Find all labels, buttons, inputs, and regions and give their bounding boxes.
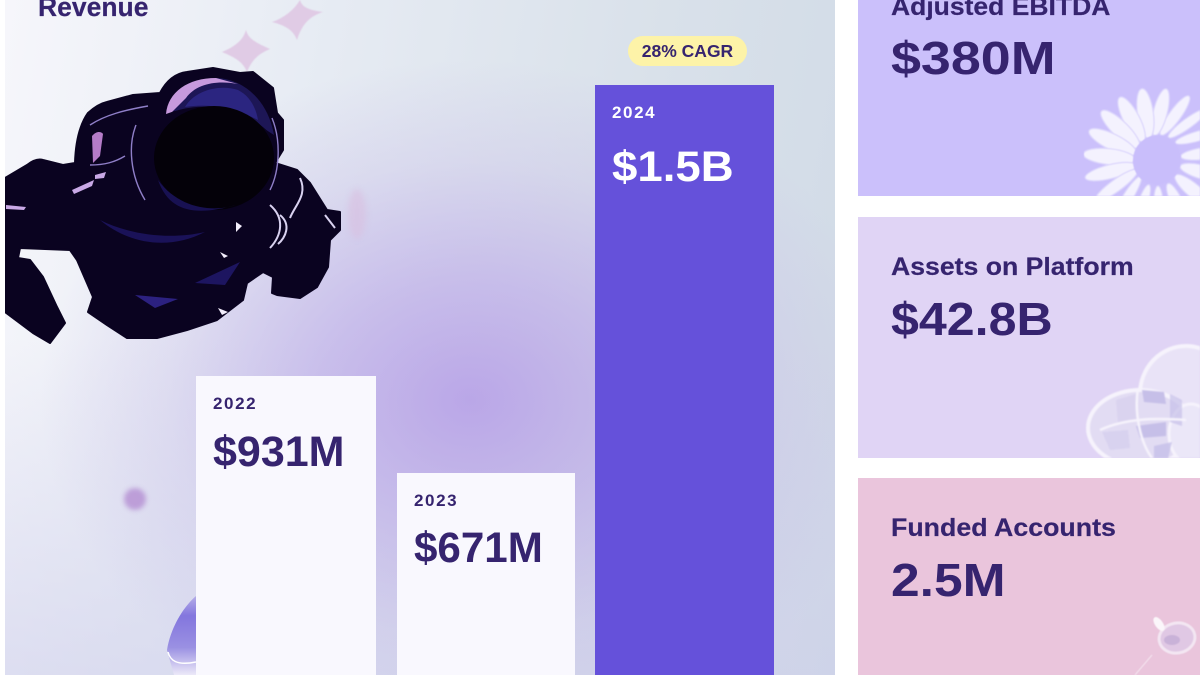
panel: revenue: [5, 0, 835, 675]
value: $931M: $931M: [213, 428, 344, 476]
label: 2023: 2023: [414, 491, 458, 510]
icon: glass sphere: [167, 596, 196, 675]
icon: small satellite: [1134, 616, 1197, 675]
card: Adjusted EBITDA: [858, 0, 1200, 196]
icon: astronaut: [5, 67, 341, 344]
label: 2022: 2022: [213, 394, 257, 413]
value: 2.5M: 2.5M: [891, 554, 1006, 606]
bar: 2024: [595, 85, 774, 675]
bar: 2023: [397, 473, 575, 675]
card: Assets on Platform: [858, 217, 1200, 458]
card: Funded Accounts: [858, 478, 1200, 675]
background glow: [5, 0, 835, 675]
bar: 2022: [196, 376, 376, 675]
icon: glass knot: [1086, 344, 1200, 458]
coil hole: [1126, 128, 1188, 192]
value: $42.8B: $42.8B: [891, 293, 1053, 345]
badge: 28% CAGR: 28% CAGR: [642, 41, 733, 61]
label: 2024: 2024: [612, 103, 656, 122]
label: Funded Accounts: Funded Accounts: [891, 514, 1116, 542]
icon: white coil: [1084, 88, 1200, 196]
value: $380M: $380M: [891, 32, 1056, 84]
value: $1.5B: $1.5B: [612, 143, 734, 191]
label: Assets on Platform: Assets on Platform: [891, 253, 1134, 281]
helmet visor: [154, 106, 274, 210]
value: $671M: $671M: [414, 524, 543, 572]
helmet dome: [170, 78, 274, 135]
badge: 28% CAGR: [628, 36, 747, 66]
icon: sparkles: [122, 0, 364, 512]
